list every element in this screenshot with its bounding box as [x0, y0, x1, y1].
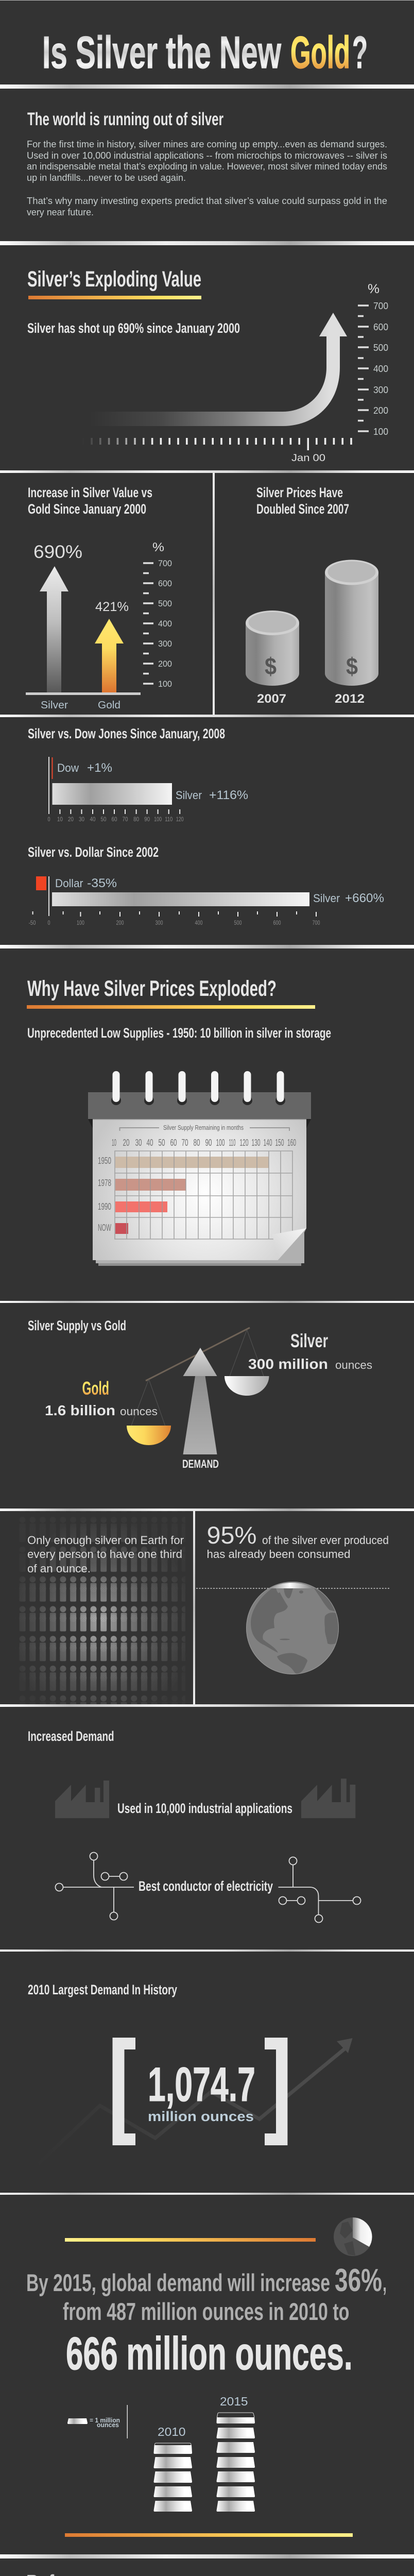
body text: very near future.	[27, 207, 94, 217]
chart scale: months: 20	[123, 1138, 130, 1148]
bar chart: dow vs silver: 90	[144, 816, 150, 823]
cylinder: 2012	[325, 560, 378, 706]
bracket: right	[265, 2038, 287, 2145]
text: one third of an ounce: of an ounce.	[27, 1562, 91, 1575]
bar chart: dollar vs silver: 0	[47, 919, 50, 926]
bar chart: dollar vs silver: 600	[273, 919, 281, 926]
chart scale: months: 130	[251, 1138, 261, 1148]
chart bars	[115, 1157, 269, 1234]
panel: silver supply vs gold scale	[28, 1318, 372, 1470]
label: gold supply: 1.6 billion	[45, 1402, 115, 1418]
chart: trend arrow	[34, 2038, 353, 2167]
bar chart: dow vs silver: Dow	[57, 761, 79, 774]
bar chart: dow vs silver: 60	[111, 816, 117, 823]
pan: gold	[127, 1426, 171, 1445]
chart scale: months: 50	[159, 1138, 165, 1148]
panel: 2015 forecast	[26, 2217, 387, 2537]
label: gold supply: ounces	[120, 1405, 158, 1418]
label: silver supply: 300 million	[248, 1356, 328, 1372]
text: forecast	[26, 2263, 387, 2380]
text: forecast: ,	[383, 2269, 387, 2296]
chart axis: percent scale: 600	[373, 322, 388, 332]
chart axis: percent scale: 700	[373, 301, 388, 311]
chart axis: percent scale: 400	[373, 364, 388, 374]
bar chart: dollar vs silver: 300	[156, 919, 163, 926]
text: one third of an ounce	[27, 1534, 184, 1575]
panel: largest demand	[28, 1982, 353, 2167]
calendar rings	[111, 1071, 285, 1105]
panel: silver vs dollar	[28, 844, 384, 926]
scale beam	[146, 1328, 250, 1381]
icon: circuit left	[56, 1853, 134, 1920]
cylinder: 2007: 2007	[257, 692, 286, 706]
bar chart: dow vs silver: 20	[68, 816, 74, 823]
stack: 2010: 2010	[158, 2425, 185, 2438]
chart scale: months: 150	[275, 1138, 284, 1148]
bar chart: dollar vs silver: 700	[312, 919, 320, 926]
axis labels: Gold	[98, 700, 120, 711]
body text: Used in over 10,000 industrial applications -- from microchips to microwaves -- silver is	[27, 150, 387, 161]
bar chart: dollar vs silver	[29, 876, 384, 926]
panel: intro text	[27, 109, 387, 217]
bracket: left	[112, 2038, 135, 2145]
chart axis: percent scale: 200	[158, 659, 172, 669]
value: 1,074.7: 1,074.7	[148, 2057, 255, 2111]
arrow: curved growth arrow	[90, 313, 347, 426]
chart axis: percent scale: 100	[158, 679, 172, 689]
icon: pie globe	[334, 2217, 372, 2256]
heading: increase in silver value: Increase in Silver Value vs	[28, 485, 152, 500]
chart axis: percent scale: 600	[158, 579, 172, 588]
chart scale: months: 60	[170, 1138, 177, 1148]
label: silver supply: ounces	[335, 1359, 372, 1371]
chart axis: percent scale: 100	[373, 427, 388, 437]
bar chart: dow vs silver: 120	[176, 816, 184, 823]
body text	[27, 139, 387, 217]
cylinder: 2007	[246, 611, 299, 706]
arrow: gold	[95, 619, 124, 692]
bar chart: dow vs silver: 80	[133, 816, 139, 823]
dashed line	[196, 1588, 389, 1589]
icon grid: people	[15, 1511, 185, 1704]
row labels: NOW	[98, 1223, 111, 1233]
body text: an indispensable metal that’s exploding in value. However, most silver mined today ends	[27, 161, 387, 172]
text: one third of an ounce: every person to have one third	[27, 1548, 182, 1561]
globe cap	[270, 1583, 314, 1588]
heading: largest demand: 2010 Largest Demand In History	[28, 1982, 177, 1997]
chart scale: months: 30	[135, 1138, 142, 1148]
bar chart: dollar vs silver: +660%	[345, 891, 384, 905]
title: Gold	[290, 27, 350, 78]
heading: silver vs dow: Silver vs. Dow Jones Since January, 2008	[28, 726, 225, 741]
chart axis: percent scale: 700	[158, 558, 172, 568]
chart scale: months: 10	[112, 1138, 116, 1148]
bar chart: dow vs silver: 40	[90, 816, 96, 823]
bar chart: dollar vs silver: 100	[77, 919, 84, 926]
arrow: silver	[40, 566, 68, 692]
body text: up in landfills...never to be used again.	[27, 173, 186, 183]
text: one third of an ounce: Only enough silver on Earth for	[27, 1534, 184, 1547]
unit: million ounces: million ounces	[148, 2109, 254, 2124]
chart scale: months: 70	[181, 1138, 188, 1148]
heading: silver vs dollar: Silver vs. Dollar Since 2002	[28, 844, 159, 860]
cylinder: 2007: $	[265, 653, 277, 680]
bar chart: dollar vs silver: 400	[195, 919, 203, 926]
chart axis: percent scale: 300	[158, 639, 172, 649]
icon: globe	[246, 1582, 341, 1674]
pan: silver	[225, 1376, 269, 1396]
bar chart: dow vs silver: 0	[47, 816, 50, 823]
panel: 95 percent consumed	[196, 1521, 389, 1674]
label: silver supply: Silver	[290, 1330, 328, 1351]
chart axis: percent scale: 300	[373, 385, 388, 395]
text: best conductor: Best conductor of electricity	[139, 1878, 273, 1894]
bar chart: dow vs silver: +1%	[87, 761, 112, 775]
chart scale: months: 120	[240, 1138, 248, 1148]
calendar page	[93, 1119, 306, 1260]
heading: prices doubled: Doubled Since 2007	[256, 501, 349, 517]
heading: prices doubled: Silver Prices Have	[256, 485, 343, 500]
chart scale: months: 160	[287, 1138, 296, 1148]
chart axis: time ticks: Jan 00	[291, 453, 325, 464]
chart scale: months: 90	[205, 1138, 212, 1148]
value: 421 percent: 421%	[95, 600, 129, 614]
subheading: 690 percent: Silver has shot up 690% since January 2000	[27, 320, 240, 336]
heading: prices doubled	[256, 485, 349, 517]
chart axis: percent scale	[143, 540, 172, 689]
chart scale: months: 100	[216, 1138, 225, 1148]
icon: circuit right	[278, 1857, 360, 1923]
cylinder: 2012: 2012	[335, 692, 365, 706]
scale cords	[131, 1330, 264, 1426]
panel: people	[15, 1511, 185, 1704]
bar chart: dollar vs silver: 200	[116, 919, 124, 926]
bar chart: dollar vs silver: -35%	[87, 876, 117, 890]
bar chart: dow vs silver: 70	[123, 816, 128, 823]
heading: increased demand: Increased Demand	[28, 1728, 114, 1744]
panel: increased demand	[28, 1728, 360, 1923]
stack: 2010	[153, 2425, 192, 2512]
icon: factory right	[301, 1778, 355, 1818]
bar chart: dow vs silver: 50	[101, 816, 107, 823]
heading: increase in silver value	[28, 485, 152, 517]
bar chart: dow vs silver: 100	[154, 816, 162, 823]
chart axis: percent scale: %	[368, 282, 380, 296]
chart scale: months: 110	[229, 1138, 236, 1148]
bar chart: dollar vs silver: Dollar	[55, 877, 83, 890]
chart axis: percent scale	[358, 282, 388, 437]
text: 95 percent	[207, 1521, 389, 1561]
legend	[67, 2405, 128, 2438]
legend: ounces	[97, 2421, 119, 2429]
panel: exploding value	[27, 267, 388, 464]
stack: 2015: 2015	[220, 2395, 248, 2408]
body text: That’s why many investing experts predict that silver’s value could surpass gold in the	[27, 196, 387, 206]
chart axis: percent scale: 500	[373, 343, 388, 353]
label: silver supply	[248, 1330, 372, 1372]
row labels: 1978	[98, 1178, 111, 1188]
axis labels: Silver	[41, 700, 68, 711]
icon: factory left	[55, 1781, 109, 1818]
heading: world running out: The world is running out of silver	[27, 109, 223, 129]
chart title	[119, 1124, 289, 1131]
legend: = 1 million	[90, 2416, 120, 2424]
heading: supply vs gold: Silver Supply vs Gold	[28, 1318, 126, 1333]
body text: For the first time in history, silver mines are coming up empty...even as demand surges.	[27, 139, 387, 149]
bar chart: dow vs silver: Silver	[176, 789, 202, 802]
chart axis: percent scale: 500	[158, 599, 172, 608]
chart scale: months: 40	[146, 1138, 153, 1148]
chart scale: months: 140	[264, 1138, 272, 1148]
bar chart: dow vs silver: 10	[57, 816, 63, 823]
axis labels	[41, 700, 120, 711]
bar chart: dollar vs silver: Silver	[313, 892, 340, 905]
bar chart: dow vs silver: 30	[79, 816, 84, 823]
heading: why have prices exploded: Why Have Silver Prices Exploded?	[27, 976, 277, 1001]
chart axis: percent scale: 400	[158, 619, 172, 629]
chart scale: months	[112, 1138, 296, 1148]
text: forecast: 36%	[335, 2263, 382, 2298]
bar chart: dollar vs silver: -50	[29, 919, 36, 926]
panel: silver vs gold arrows	[26, 485, 172, 711]
title: Is Silver the New	[42, 27, 281, 78]
scale stand arrow: DEMAND	[182, 1458, 219, 1470]
text: 95 percent: of the silver ever produced	[262, 1534, 389, 1547]
panel: silver prices doubled	[246, 485, 378, 706]
chart axis: percent scale: 200	[373, 405, 388, 416]
text: industrial applications: Used in 10,000 industrial applications	[117, 1801, 292, 1816]
chart title: Silver Supply Remaining in months	[163, 1124, 244, 1131]
row labels: 1990	[98, 1201, 111, 1212]
row labels: 1950	[98, 1156, 111, 1166]
text: 95 percent: has already been consumed	[207, 1548, 350, 1561]
bar chart: dollar vs silver: 500	[234, 919, 242, 926]
label: gold supply	[45, 1378, 158, 1418]
heading: exploding value: Silver’s Exploding Value	[27, 267, 201, 292]
chart scale: months: 80	[194, 1138, 200, 1148]
bar chart: dow vs silver: +116%	[209, 788, 248, 802]
label: gold supply: Gold	[82, 1378, 109, 1399]
page curl	[272, 1228, 306, 1260]
bar chart: dow vs silver: 110	[165, 816, 173, 823]
calendar chart: silver supply remaining	[88, 1071, 311, 1266]
bar chart: dow vs silver	[47, 757, 248, 823]
title: ?	[352, 27, 368, 78]
value: 690 percent: 690%	[33, 542, 82, 562]
stack: 2015	[216, 2395, 255, 2512]
panel: silver vs dow	[28, 726, 248, 823]
text: 95 percent: 95%	[207, 1521, 256, 1549]
scale stand arrow	[182, 1348, 219, 1470]
row labels	[98, 1156, 111, 1233]
cylinder: 2012: $	[346, 653, 358, 680]
chart axis: time ticks	[83, 438, 351, 464]
heading: increase in silver value: Gold Since January 2000	[28, 501, 146, 517]
chart axis: percent scale: %	[152, 540, 164, 554]
